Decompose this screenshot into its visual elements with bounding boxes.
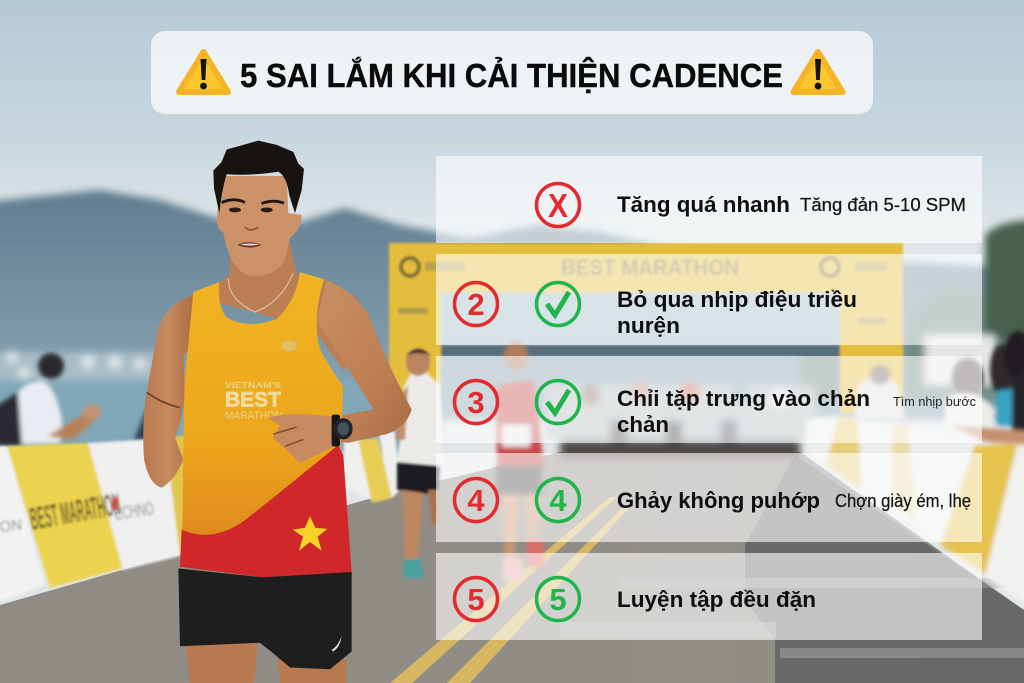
heading: mistake 2: Bỏ qua nhịp điệu triều	[617, 287, 857, 312]
heading: mistake 1: Tăng quá nhanh	[617, 192, 790, 217]
runner: chest logo: VIETNAM'S	[225, 381, 282, 390]
badge: green 5	[536, 578, 580, 620]
heading: mistake 3	[617, 386, 870, 437]
heading: mistake 3: chản	[617, 412, 669, 437]
runner: hair	[213, 141, 304, 213]
background: finish gantry: BEST MARATHON	[561, 255, 739, 280]
runner: watch	[332, 415, 353, 446]
fix text 3: Tìm nhịp bước	[893, 394, 976, 409]
background: runner in red singlet	[496, 341, 544, 582]
background: distant trees and palm	[800, 220, 1024, 400]
runner: chest logo: MARATHON	[225, 410, 282, 422]
runner: shorts	[178, 568, 352, 669]
icon: green check	[536, 282, 580, 326]
badge: green 5: 5	[549, 582, 567, 617]
heading: mistake 2: nurện	[617, 313, 680, 338]
badge: red 3	[454, 380, 498, 424]
runner: facial features	[222, 200, 284, 248]
badge: green 4: 4	[549, 483, 567, 518]
background: left spectator	[0, 353, 172, 446]
badge: red 5	[454, 578, 498, 620]
panel: mistake 2	[436, 254, 982, 345]
panel: mistake 5	[436, 553, 982, 640]
background: mountains	[0, 190, 1024, 420]
badge: red 2: 2	[467, 287, 485, 322]
icon: green check	[536, 380, 580, 424]
badge: red 3: 3	[467, 385, 485, 420]
heading: mistake 2	[617, 287, 857, 338]
badge: red 4	[454, 478, 498, 522]
runner: neck and shoulders	[193, 243, 370, 370]
title panel	[151, 31, 873, 114]
runner: chest logo	[225, 340, 297, 422]
runner: necklace	[228, 273, 293, 312]
panel: mistake 4	[436, 453, 982, 542]
heading: mistake 3: Chỉi tặp trưng vào chản	[617, 386, 870, 411]
badge: green 4	[536, 478, 580, 522]
icon: warning right	[794, 52, 842, 92]
background: left barriers: BEST MARATHON	[27, 486, 123, 537]
background: road	[0, 452, 1024, 683]
background: far crowd	[545, 382, 815, 458]
background: left barriers: ECHNO	[114, 500, 155, 525]
main runner	[143, 141, 412, 683]
runner: chest logo: BEST	[225, 388, 281, 412]
icon: warning left	[179, 52, 228, 92]
background: runner in white singlet	[396, 348, 445, 578]
runner: tank top	[180, 272, 352, 577]
icon: red X: X	[548, 187, 568, 224]
runner: face and ears	[217, 176, 302, 276]
heading: mistake 5: Luyện tập đều đặn	[617, 587, 816, 612]
background: right spectators	[855, 331, 1024, 445]
badge: red 2	[454, 282, 498, 326]
badge: red 5: 5	[467, 582, 485, 617]
runner: star	[293, 516, 327, 551]
fix text 4: Chợn giày ém, lhẹ	[835, 491, 971, 511]
background: right barriers	[806, 416, 1024, 630]
runner: hand	[267, 414, 337, 463]
badge: red 4: 4	[467, 483, 485, 518]
background: sea and distant shore	[0, 351, 440, 453]
runner: right arm	[317, 280, 412, 443]
panel: mistake 3	[436, 356, 982, 443]
background: finish gantry	[389, 243, 903, 413]
icon: red X	[536, 184, 580, 226]
fix text 1: Tăng đản 5-10 SPM	[800, 195, 966, 215]
background: left barriers	[0, 422, 400, 605]
background: road shadow and markings	[390, 455, 1024, 683]
runner: left arm	[143, 294, 195, 488]
panel: mistake 1	[436, 156, 982, 243]
runner: legs	[185, 639, 347, 683]
runner: tank top red panel	[180, 445, 352, 577]
heading: mistake 4: Ghảy không puhớp	[617, 488, 820, 513]
title text: 5 SAI LẮM KHI CẢI THIỆN CADENCE	[240, 57, 783, 94]
